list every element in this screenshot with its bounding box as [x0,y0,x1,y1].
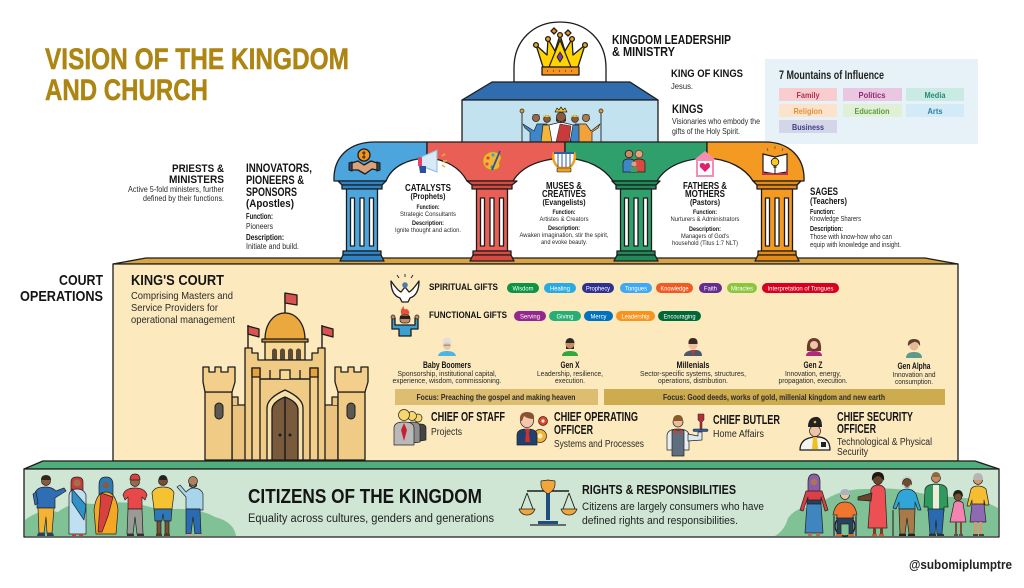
text: kings: Visionaries who embody the [672,116,760,126]
text: fathers and mothers (pastors): (Pastors) [690,197,720,207]
chief of staff [394,410,505,445]
text: functional gifts: FUNCTIONAL GIFTS [429,310,507,321]
chip: business [779,120,837,133]
text: functional gifts [429,310,701,321]
chief operating officer: OFFICER [554,423,593,437]
text: priests and ministers: MINISTERS [169,174,224,186]
heading: citizens: CITIZENS OF THE KINGDOM [248,485,482,508]
pill: miracles: Miracles [731,286,754,292]
chip: politics [843,88,902,101]
text: fathers and mothers (pastors): Description: [689,226,721,233]
generation: gen alpha: consumption. [895,377,933,386]
person: green jacket man [924,472,948,536]
generation: millenials [640,338,746,385]
text: kings: gifts of the Holy Spirit. [672,126,740,136]
pill: mercy: Mercy [590,314,607,320]
text: innovators (apostles): Pioneers [246,222,273,231]
text: innovators (apostles): Description: [246,233,284,242]
chief butler: CHIEF BUTLER [713,413,780,427]
credit handle: @subomiplumptre [909,557,1012,572]
chief security officer: CHIEF SECURITY [837,410,913,424]
pill: encouraging: Encouraging [664,314,696,320]
text: sages (teachers): SAGES [810,186,838,198]
panel: 7 mountains of influence [765,59,978,144]
text: sages (teachers): equip with knowledge and insight. [810,242,901,249]
person: yellow shirt man [152,475,174,536]
icon: security officer [800,417,830,450]
pill: interpretation of tongues [762,283,839,293]
pill: interpretation of tongues: Interpretation of Tongues [768,286,834,292]
chief security officer: Technological & Physical [837,437,932,448]
generation: gen z: propagation, execution. [778,376,848,385]
text: sages (teachers): Description: [810,226,843,233]
text: innovators (apostles): Function: [246,212,273,221]
icon: operations manager [517,412,548,445]
chief operating officer [517,410,644,450]
icon: group of kings [520,107,603,142]
text: innovators (apostles): SPONSORS [246,187,297,199]
generation: baby boomers: Sponsorship, institutional capital, [398,369,496,378]
left shrubs [25,502,236,536]
panel: king's court [113,264,958,461]
generation: millenials: Sector-specific systems, structures, [640,369,746,378]
chief butler [667,413,780,456]
text: rights and responsibilities: defined rights and responsibilities. [582,515,738,527]
pill: giving: Giving [556,314,574,320]
text: king of kings: KING OF KINGS [671,68,743,80]
person: old man with cane [893,477,921,536]
chip: family [779,88,837,101]
text: catalysts (prophets): Description: [412,220,444,227]
text: king's court heading: Comprising Masters and [131,290,233,302]
text: muses and creatives (evangelists): (Evangelists) [542,197,586,207]
chip: religion [779,104,837,117]
chief security officer [800,410,932,458]
dome with crown [514,22,606,82]
heading: court operations [20,272,103,305]
heading: kingdom leadership [612,33,731,59]
generation: millenials: operations, distribution. [658,376,728,385]
text: rights and responsibilities: RIGHTS & RESPONSIBILITIES [582,483,736,497]
text: innovators (apostles) [246,163,312,251]
heading: court operations: COURT [59,272,103,289]
pill: faith: Faith [704,286,717,292]
text: catalysts (prophets): CATALYSTS [405,183,451,194]
pill: leadership: Leadership [622,314,650,320]
person: red hijab woman [69,477,86,536]
pill: serving [514,311,546,321]
text: muses and creatives (evangelists): Description: [548,225,580,232]
generation: baby boomers: experience, wisdom, commissioning. [392,376,502,385]
text: rights and responsibilities: Citizens are largely consumers who have [582,501,764,513]
pill: leadership [616,311,655,321]
text: fathers and mothers (pastors): FATHERS & [683,181,727,192]
pill: giving [549,311,581,321]
text: king's court heading [131,272,235,326]
column: orange [753,181,801,261]
icon: palette [483,151,501,170]
text: fathers and mothers (pastors): Managers of God's [681,233,730,240]
chip: media [906,88,964,101]
title [45,43,349,107]
text: king of kings [671,68,743,91]
pill: prophecy [582,283,614,293]
person: blue hijab woman [94,477,118,534]
text: fathers and mothers (pastors): Nurturers & Administrators [670,216,740,223]
generation: gen x [537,338,603,385]
generation: gen z [778,338,848,385]
text: spiritual gifts [429,282,839,293]
icon: megaphone [418,150,447,173]
chief security officer: Security [837,447,868,458]
focus bar: good deeds [604,389,945,405]
chief operating officer: CHIEF OPERATING [554,410,638,424]
icon: lyre [553,152,575,172]
pill: knowledge: Knowledge [660,286,689,292]
text: rights and responsibilities [582,483,764,527]
panel: 7 mountains of influence: 7 Mountains of Influence [779,68,884,82]
title: VISION OF THE KINGDOM [45,43,349,76]
text: kings [672,104,760,136]
heading: citizens: Equality across cultures, genders and generations [248,513,494,525]
icon: coin and handshake [349,149,380,174]
pill: prophecy: Prophecy [586,286,611,292]
text: muses and creatives (evangelists) [520,181,609,246]
text: innovators (apostles): (Apostles) [246,198,294,210]
pill: healing [544,283,576,293]
platform top: king's court roof [113,258,958,264]
generation: gen z: Gen Z [804,360,823,370]
icon: staff group [394,410,426,445]
chip: media: Media [924,90,946,100]
person: red turban man [123,474,147,536]
text: priests and ministers: Active 5-fold ministers, further [128,185,224,194]
arcade of coloured arches [334,142,804,181]
pill: wisdom [507,283,539,293]
pill: tongues: Tongues [625,286,648,292]
text: catalysts (prophets): Strategic Consultants [400,211,457,218]
text: sages (teachers): (Teachers) [810,196,847,207]
heading: citizens [248,485,494,525]
column: blue [338,181,386,261]
text: priests and ministers: defined by their functions. [143,194,224,203]
chief butler: Home Affairs [713,429,764,440]
chief of staff: CHIEF OF STAFF [431,410,505,424]
text: priests and ministers: PRIESTS & [172,163,224,175]
icon: crown [534,28,587,75]
generation: baby boomers [392,338,502,385]
panel: citizens of the kingdom [24,461,999,537]
text: fathers and mothers (pastors): MOTHERS [685,189,725,200]
pill: serving: Serving [520,314,540,320]
person: wheelchair man [833,489,857,536]
text: innovators (apostles): Initiate and build. [246,242,299,251]
chip: education [843,104,902,117]
title: AND CHURCH [45,74,208,107]
text: king of kings: Jesus. [671,81,693,91]
generation: gen x: execution. [555,376,585,385]
icon: family [623,150,645,172]
generation: gen alpha: Gen Alpha [898,361,931,371]
text: muses and creatives (evangelists): Function: [552,209,576,216]
text: sages (teachers): Those with know-how who can [810,234,892,241]
right shrubs [775,488,998,536]
icon: house with heart [694,151,716,176]
text: kings: KINGS [672,104,703,116]
text: catalysts (prophets): Function: [416,204,440,211]
text: sages (teachers): Knowledge Sharers [810,216,861,223]
icon: book with lightbulb [763,146,787,174]
text: catalysts (prophets): Ignite thought and action. [395,227,461,234]
person: grandmother [967,473,989,536]
chip: politics: Politics [858,90,886,100]
chip: education: Education [854,106,890,116]
chief of staff: Projects [431,427,462,438]
icon: scales of justice [519,480,577,525]
chief operating officer: Systems and Processes [554,439,644,450]
text: spiritual gifts: SPIRITUAL GIFTS [429,282,498,293]
column: red [467,181,517,261]
pill: encouraging [658,311,701,321]
focus bar: good deeds: Focus: Good deeds, works of gold, millenial kingdom and new earth [663,393,885,402]
text: muses and creatives (evangelists): Awaken imagination, stir the spirit, [520,232,609,239]
text: king's court heading: KING'S COURT [131,272,224,289]
text: innovators (apostles): PIONEERS & [246,175,304,187]
focus bar: preaching: Focus: Preaching the gospel and making heaven [416,393,576,402]
icon: castle [203,293,368,460]
text: priests and ministers [128,163,224,203]
heading: court operations: OPERATIONS [20,288,103,305]
icon: butler [667,414,708,456]
text: fathers and mothers (pastors): Function: [693,209,717,216]
pill: knowledge [656,283,693,293]
text: sages (teachers) [810,186,901,249]
text: muses and creatives (evangelists): Artistes & Creators [540,216,589,223]
column: green [612,181,660,261]
pill: faith [699,283,722,293]
chip: arts: Arts [928,106,943,116]
icon: dove [391,274,419,302]
heading: kingdom leadership: & MINISTRY [612,45,676,59]
pill: wisdom: Wisdom [512,286,534,292]
person: red dress woman [858,472,887,536]
generation: gen alpha: Innovation and [892,370,936,379]
generation: gen x: Leadership, resilience, [537,369,603,378]
generation: gen z: Innovation, energy, [785,369,841,378]
chip: religion: Religion [794,106,822,116]
pill: mercy [584,311,613,321]
heading: kingdom leadership: KINGDOM LEADERSHIP [612,33,731,47]
generation: millenials: Millenials [676,360,710,370]
chief security officer: OFFICER [837,422,876,436]
text: king's court heading: operational management [131,314,235,326]
focus bar: preaching [395,389,598,405]
person: blue shirt man [33,475,66,536]
text: sages (teachers): Function: [810,209,835,216]
text: king's court heading: Service Providers for [131,302,218,314]
pill: healing: Healing [550,286,570,292]
pill: miracles [727,283,757,293]
text: muses and creatives (evangelists): CREATIVES [542,189,586,200]
person: purple hijab woman [800,474,828,536]
icon: functional gifts figure [391,306,419,336]
generation: gen alpha [892,339,936,386]
text: fathers and mothers (pastors): household (Titus 1:7 NLT) [672,240,738,247]
text: innovators (apostles): INNOVATORS, [246,163,312,175]
chip: business: Business [792,122,824,132]
text: muses and creatives (evangelists): and evoke beauty. [541,239,587,246]
text: catalysts (prophets) [395,183,461,234]
pill: tongues [620,283,652,293]
text: muses and creatives (evangelists): MUSES & [546,181,582,192]
generation: gen x: Gen X [560,360,580,370]
chip: arts [906,104,964,117]
roof and kings chamber [462,82,658,143]
generation: baby boomers: Baby Boomers [423,360,471,370]
text: fathers and mothers (pastors) [670,181,740,247]
person: light blue shirt man [177,476,203,536]
chip: family: Family [796,90,820,100]
text: catalysts (prophets): (Prophets) [410,191,446,201]
person: child in pink [950,490,966,536]
